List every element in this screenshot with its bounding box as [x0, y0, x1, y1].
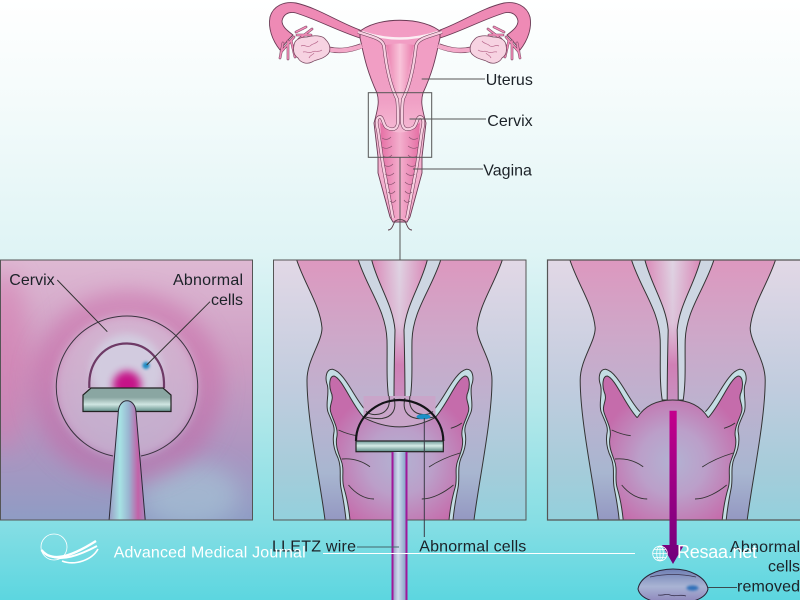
- label: Cervix: Cervix: [9, 272, 55, 289]
- right fallopian tube and ovary: [438, 3, 531, 63]
- bleeding spot: [113, 371, 141, 399]
- top band of the uterus: [362, 32, 438, 38]
- loop wire dome: [356, 400, 443, 441]
- loop plate: [83, 388, 171, 412]
- uterine cavity: [386, 44, 414, 122]
- cervix lower portion: [364, 396, 436, 427]
- abnormal cells spot: [416, 414, 430, 419]
- connector from box to panels: [399, 157, 401, 260]
- label: cells: cells: [211, 292, 243, 309]
- anatomy diagram: uterus, cervix and vagina: [269, 3, 531, 230]
- panel: cervix front view: [0, 260, 253, 527]
- removed cells specimen: [638, 569, 737, 600]
- loop handle: [109, 401, 145, 521]
- panel border: [0, 260, 252, 520]
- excised area dome: [637, 400, 708, 418]
- icon: journal logo: [41, 534, 98, 563]
- vaginal opening: [388, 220, 412, 230]
- label: Abnormal cells removed: removed: [737, 579, 800, 596]
- label: Abnormal cells: Abnormal: [173, 272, 243, 289]
- watermark: site name: Resaa.net: [677, 542, 757, 562]
- label: Abnormal cells removed: cells: [768, 559, 800, 576]
- loop plate: [356, 441, 443, 452]
- watermark divider line: [323, 552, 635, 554]
- cervix outline: [56, 316, 198, 456]
- label: Uterus: Uterus: [486, 72, 533, 89]
- canal curls: [365, 396, 434, 419]
- panel: after removal: [547, 260, 800, 520]
- label: Abnormal cells removed: Abnormal: [730, 539, 800, 556]
- zoom box around cervix: [368, 93, 432, 157]
- left uterine wall: [358, 32, 398, 218]
- right uterine wall: [402, 32, 442, 218]
- label: Abnormal cells: Abnormal cells: [419, 539, 526, 556]
- label: Cervix: Cervix: [487, 113, 533, 130]
- leader: LLETZ wire: [357, 546, 399, 548]
- watermark: journal name: Advanced Medical Journal: [114, 544, 306, 561]
- label: Vagina: [413, 163, 532, 180]
- leader lines: [57, 280, 210, 365]
- panel border: [548, 260, 800, 520]
- panel: LLETZ wire on cervix, side view: [274, 260, 526, 520]
- loop wire arc: [89, 344, 164, 388]
- uterus and vagina outer shape: [358, 20, 442, 222]
- label: Cervix: [410, 113, 533, 130]
- icon: globe: [653, 546, 667, 561]
- panel border: [274, 260, 526, 520]
- label: Uterus: [422, 72, 533, 89]
- label: Vagina: Vagina: [483, 163, 532, 180]
- arrow: removal direction: [662, 411, 684, 564]
- label: LLETZ wire: LLETZ wire: [272, 539, 356, 556]
- abnormal cells spot: [142, 362, 150, 369]
- leader: abnormal cells in panel 2: [423, 418, 425, 537]
- left fallopian tube and ovary: [269, 3, 362, 63]
- vaginal lumen: [380, 122, 420, 218]
- label: Abnormal cells removed: [730, 539, 800, 596]
- LLETZ wire handle: [392, 452, 406, 600]
